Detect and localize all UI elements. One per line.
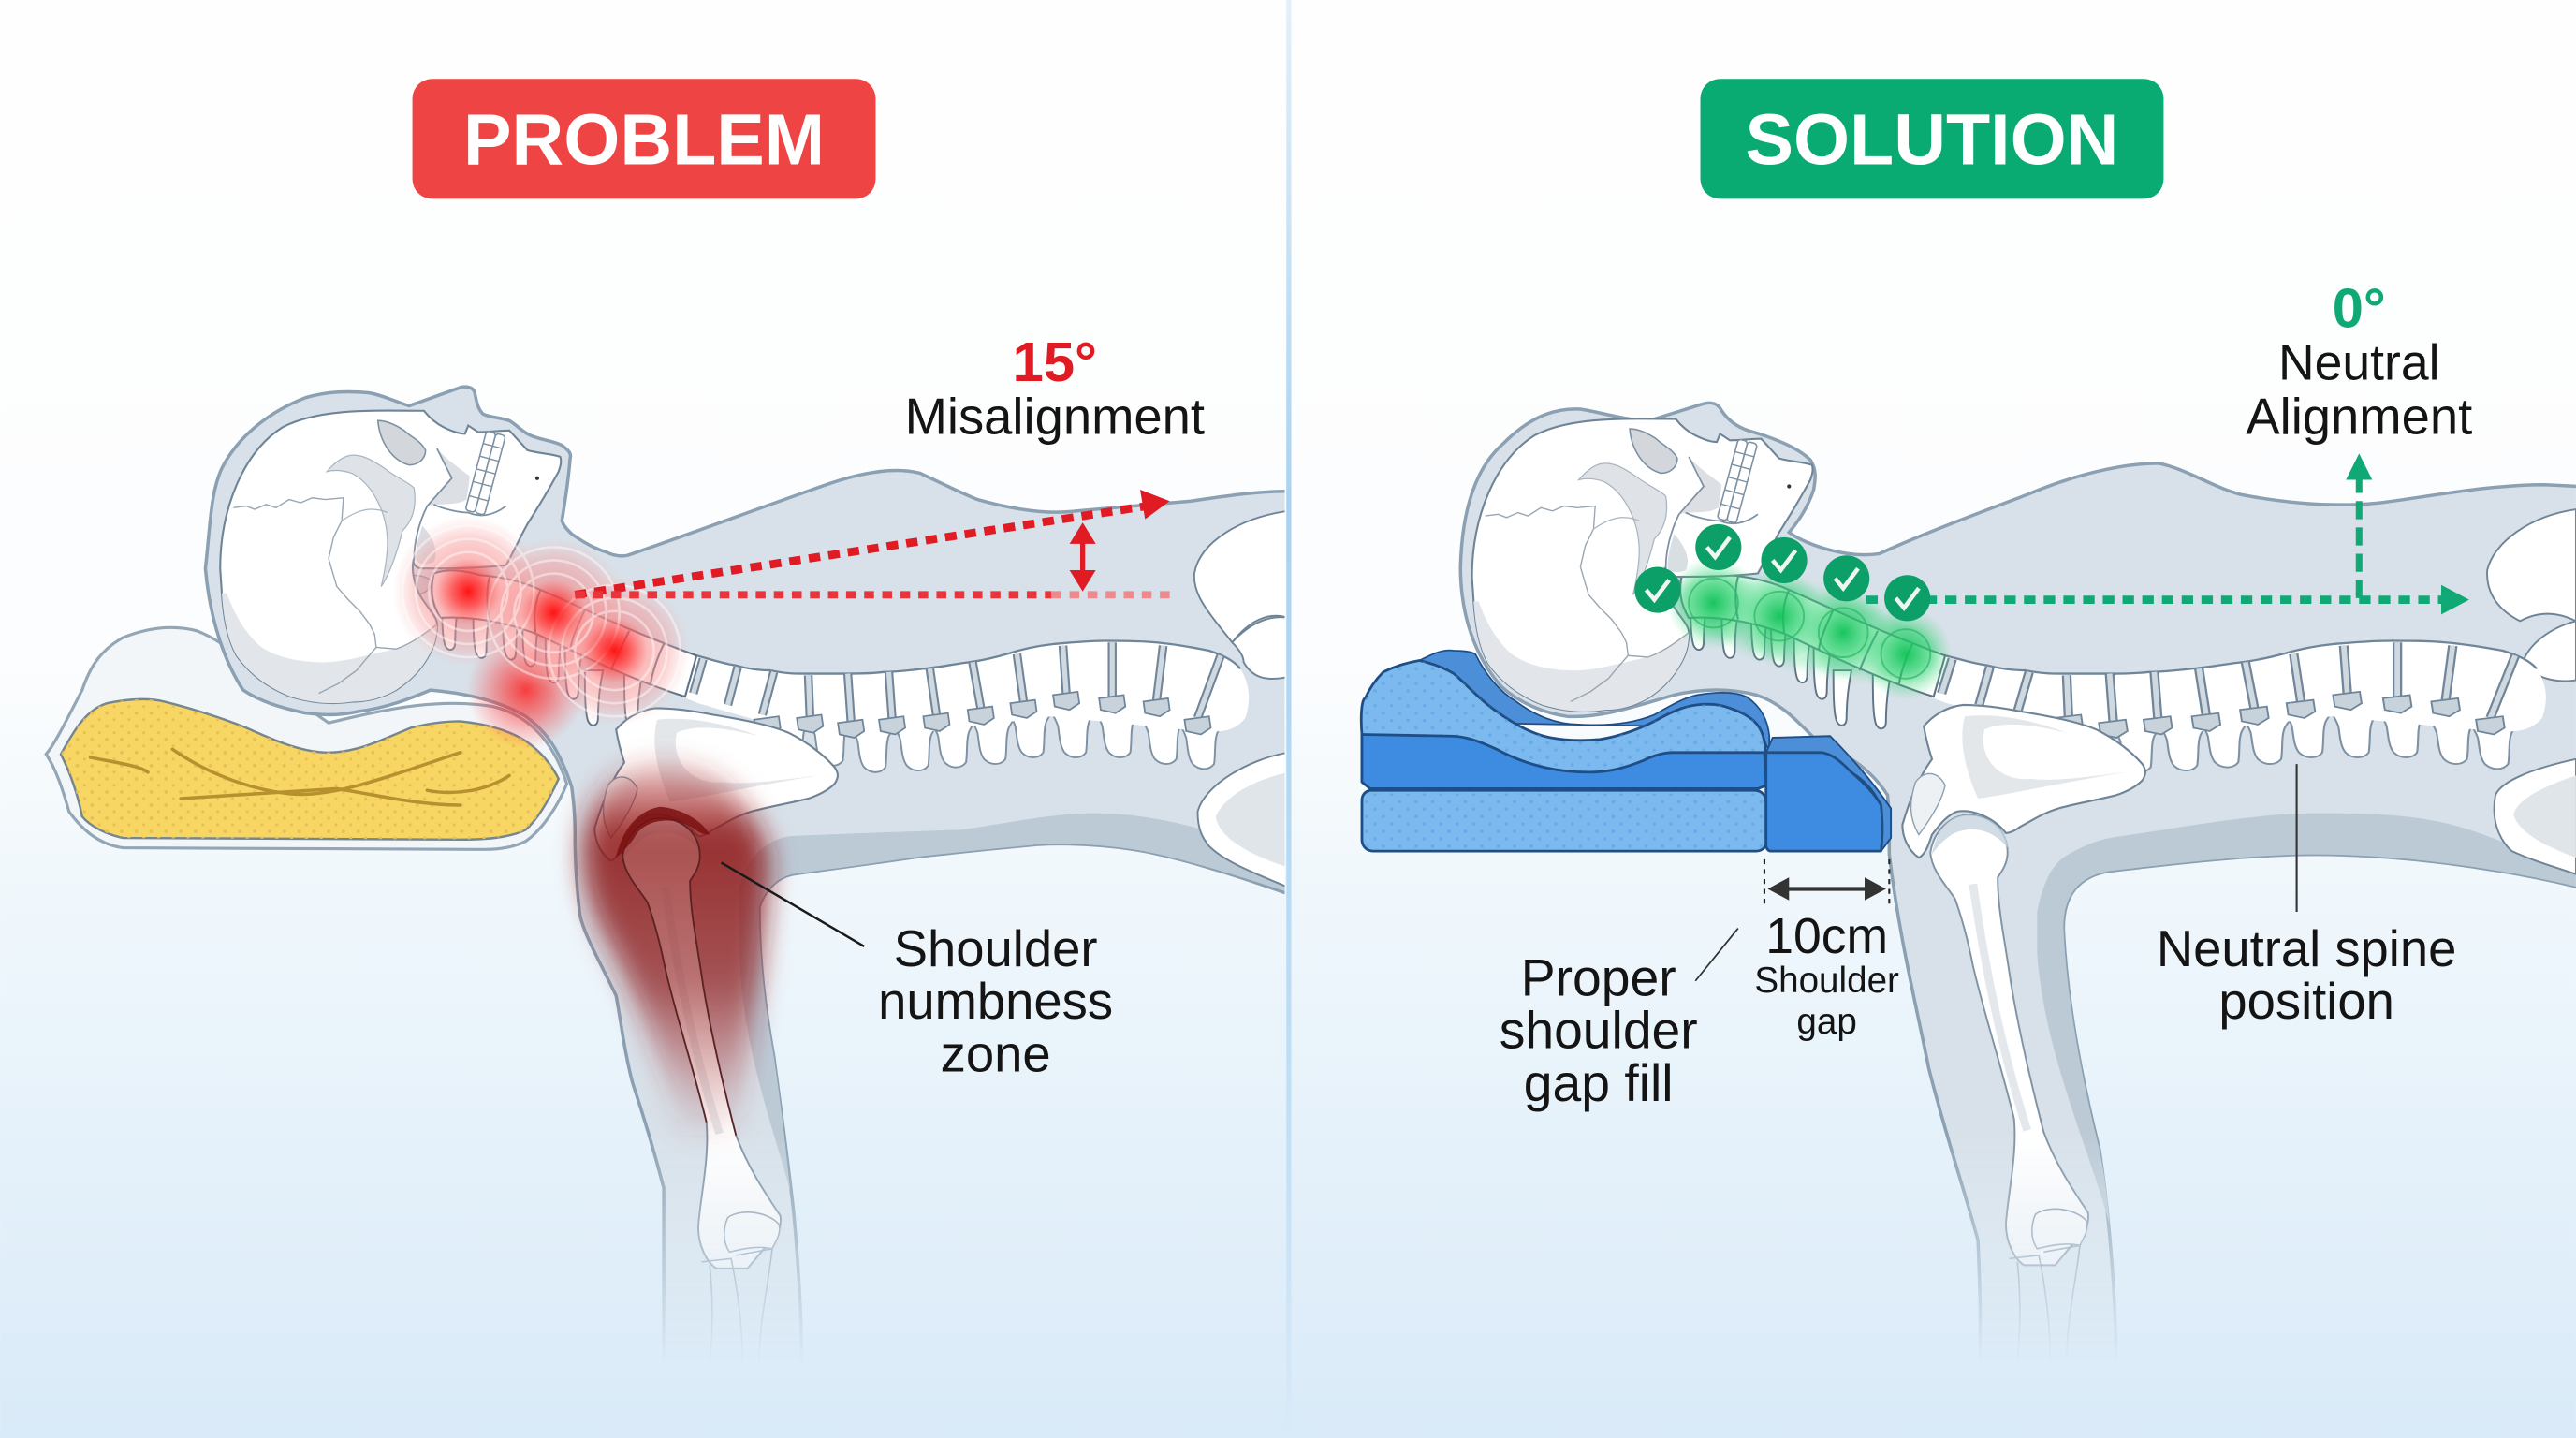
solution badge: [1701, 79, 2163, 198]
body silhouette: [1460, 403, 2576, 1364]
label: 10cm shoulder gap: [1754, 909, 1899, 1042]
label: proper shoulder gap fill: [1500, 949, 1698, 1112]
neutral alignment arrows: [1866, 453, 2469, 614]
humerus over glow: [616, 807, 736, 1136]
label: 15 degrees misalignment: 15°: [1013, 330, 1097, 393]
skull: [220, 411, 561, 703]
label: proper shoulder gap fill: shoulder: [1500, 1002, 1698, 1060]
label: proper shoulder gap fill: gap fill: [1524, 1054, 1674, 1112]
cervical spine: [1652, 570, 1945, 728]
solution badge: SOLUTION: [1745, 100, 2118, 181]
panel: solution: [1361, 79, 2576, 1364]
label: 0 degrees neutral alignment: 0°: [2333, 276, 2386, 339]
leader: gap fill: [1695, 929, 1738, 981]
misalignment angle arrows: [575, 490, 1177, 594]
label: 10cm shoulder gap: Shoulder: [1754, 961, 1899, 1001]
cervical spine: [403, 570, 696, 728]
label: 0 degrees neutral alignment: Neutral: [2278, 335, 2440, 390]
thoracic spine: [1900, 640, 2546, 772]
shoulder and arm bones: [1902, 705, 2145, 1360]
hip bones: [2487, 509, 2576, 874]
problem badge: [413, 79, 875, 198]
panel: problem: [46, 79, 1288, 1364]
body silhouette: [205, 387, 1288, 1364]
shoulder gap filler: [1766, 736, 1891, 851]
hip bones: [1194, 511, 1288, 888]
label: neutral spine position: Neutral spine: [2157, 920, 2456, 977]
centre divider: [1286, 0, 1292, 1438]
leader: spine position: [2296, 764, 2298, 912]
label: 15 degrees misalignment: [905, 330, 1205, 445]
label: neutral spine position: [2157, 920, 2456, 1030]
label: neutral spine position: position: [2218, 973, 2394, 1030]
label: shoulder numbness zone: [878, 920, 1113, 1082]
foam bottom layer: [1362, 790, 1766, 851]
foam middle layer: [1362, 734, 1766, 788]
label: shoulder numbness zone: numbness: [878, 973, 1113, 1030]
label: 15 degrees misalignment: Misalignment: [905, 388, 1205, 445]
shoulder leader line: [722, 862, 864, 946]
skull: [1472, 418, 1813, 712]
check marks: [1634, 524, 1930, 621]
aligned spine glow: [1667, 557, 1952, 700]
label: 0 degrees neutral alignment: Alignment: [2246, 388, 2472, 445]
pillow outer shell: [46, 627, 567, 849]
label: 10cm shoulder gap: 10cm: [1765, 909, 1888, 964]
label: shoulder numbness zone: zone: [941, 1025, 1051, 1082]
thoracic spine: [655, 640, 1249, 772]
foam upper layer: [1361, 661, 1766, 781]
pillow yellow foam: [61, 699, 559, 840]
neck pain glow: [393, 516, 690, 749]
foam compression creases: [91, 749, 509, 805]
label: 10cm shoulder gap: gap: [1796, 1002, 1857, 1042]
label: 0 degrees neutral alignment: [2246, 276, 2472, 445]
label: shoulder numbness zone: Shoulder: [894, 920, 1097, 977]
shoulder numbness glow: [583, 763, 768, 1134]
shoulder and arm bones: [594, 708, 838, 1364]
rear surface of foam: [1419, 651, 1769, 753]
label: proper shoulder gap fill: Proper: [1521, 949, 1676, 1007]
10cm gap dimension: [1764, 859, 1889, 905]
problem badge: PROBLEM: [463, 100, 825, 181]
contoured foam pillow: [1361, 651, 1891, 851]
